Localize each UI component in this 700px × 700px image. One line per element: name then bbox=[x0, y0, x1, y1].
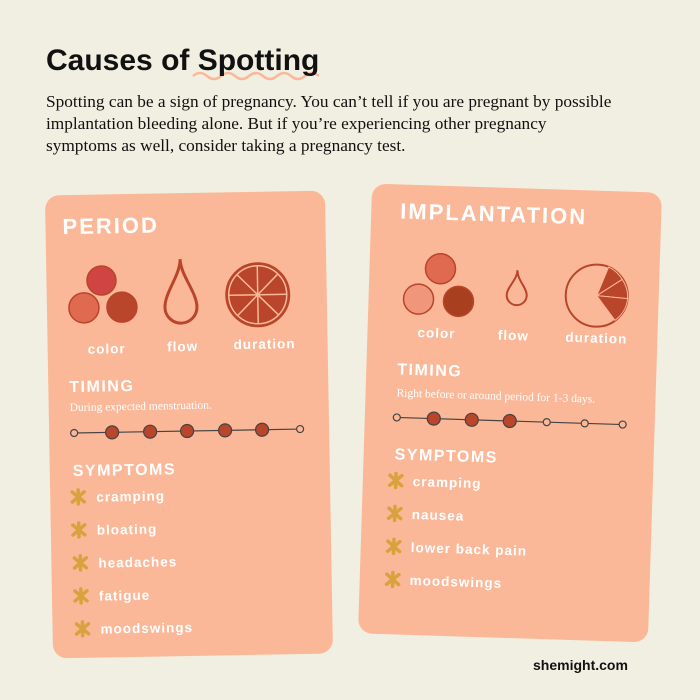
timeline bbox=[71, 423, 304, 440]
panel: period: fatigue bbox=[99, 588, 150, 604]
timeline bbox=[393, 411, 626, 431]
icon: color circles bbox=[403, 253, 475, 317]
labels: flow bbox=[167, 339, 198, 354]
heading: implantation: IMPLANTATION bbox=[400, 198, 588, 229]
title: Causes of Spotting bbox=[46, 44, 319, 77]
labels: color bbox=[88, 341, 126, 357]
labels bbox=[87, 336, 296, 357]
icon: duration partial bbox=[565, 264, 629, 328]
icon: flow drop bbox=[164, 259, 197, 323]
labels: duration bbox=[233, 336, 296, 352]
panel: implantation: cramping bbox=[413, 474, 482, 491]
symptoms: SYMPTOMS bbox=[73, 461, 176, 480]
panel: implantation: lower back pain bbox=[410, 540, 527, 559]
panel: period: headaches bbox=[98, 554, 177, 571]
intro paragraph: Spotting can be a sign of pregnancy. You can’t tell if you are pregnant by possible bbox=[46, 92, 612, 111]
intro paragraph: symptoms as well, consider taking a pregnancy test. bbox=[46, 136, 405, 155]
panel: period: cramping bbox=[96, 488, 165, 505]
panel: period bbox=[45, 191, 333, 658]
labels: color bbox=[417, 325, 456, 341]
icon: duration full bbox=[225, 262, 290, 327]
intro paragraph: implantation bleeding alone. But if you’re experiencing other pregnancy bbox=[46, 114, 547, 133]
labels: duration bbox=[565, 330, 628, 347]
timing: TIMING bbox=[69, 378, 134, 396]
panel: implantation: moodswings bbox=[409, 573, 502, 591]
icon: flow drop bbox=[506, 270, 527, 305]
panel: period: bloating bbox=[97, 522, 157, 538]
heading: period: PERIOD bbox=[62, 212, 159, 239]
panel: implantation bbox=[358, 184, 662, 642]
labels bbox=[417, 325, 628, 347]
logo: shemight.com bbox=[533, 657, 628, 673]
panel: implantation: Right before or around period for 1-3 days. bbox=[396, 387, 595, 406]
panel: period: moodswings bbox=[100, 620, 193, 637]
panel: implantation: nausea bbox=[412, 507, 465, 524]
timing: TIMING bbox=[397, 361, 463, 380]
labels: flow bbox=[498, 328, 529, 344]
symptoms: SYMPTOMS bbox=[394, 446, 498, 467]
panel: period: During expected menstruation. bbox=[70, 400, 212, 414]
icon: color circles bbox=[68, 265, 137, 323]
